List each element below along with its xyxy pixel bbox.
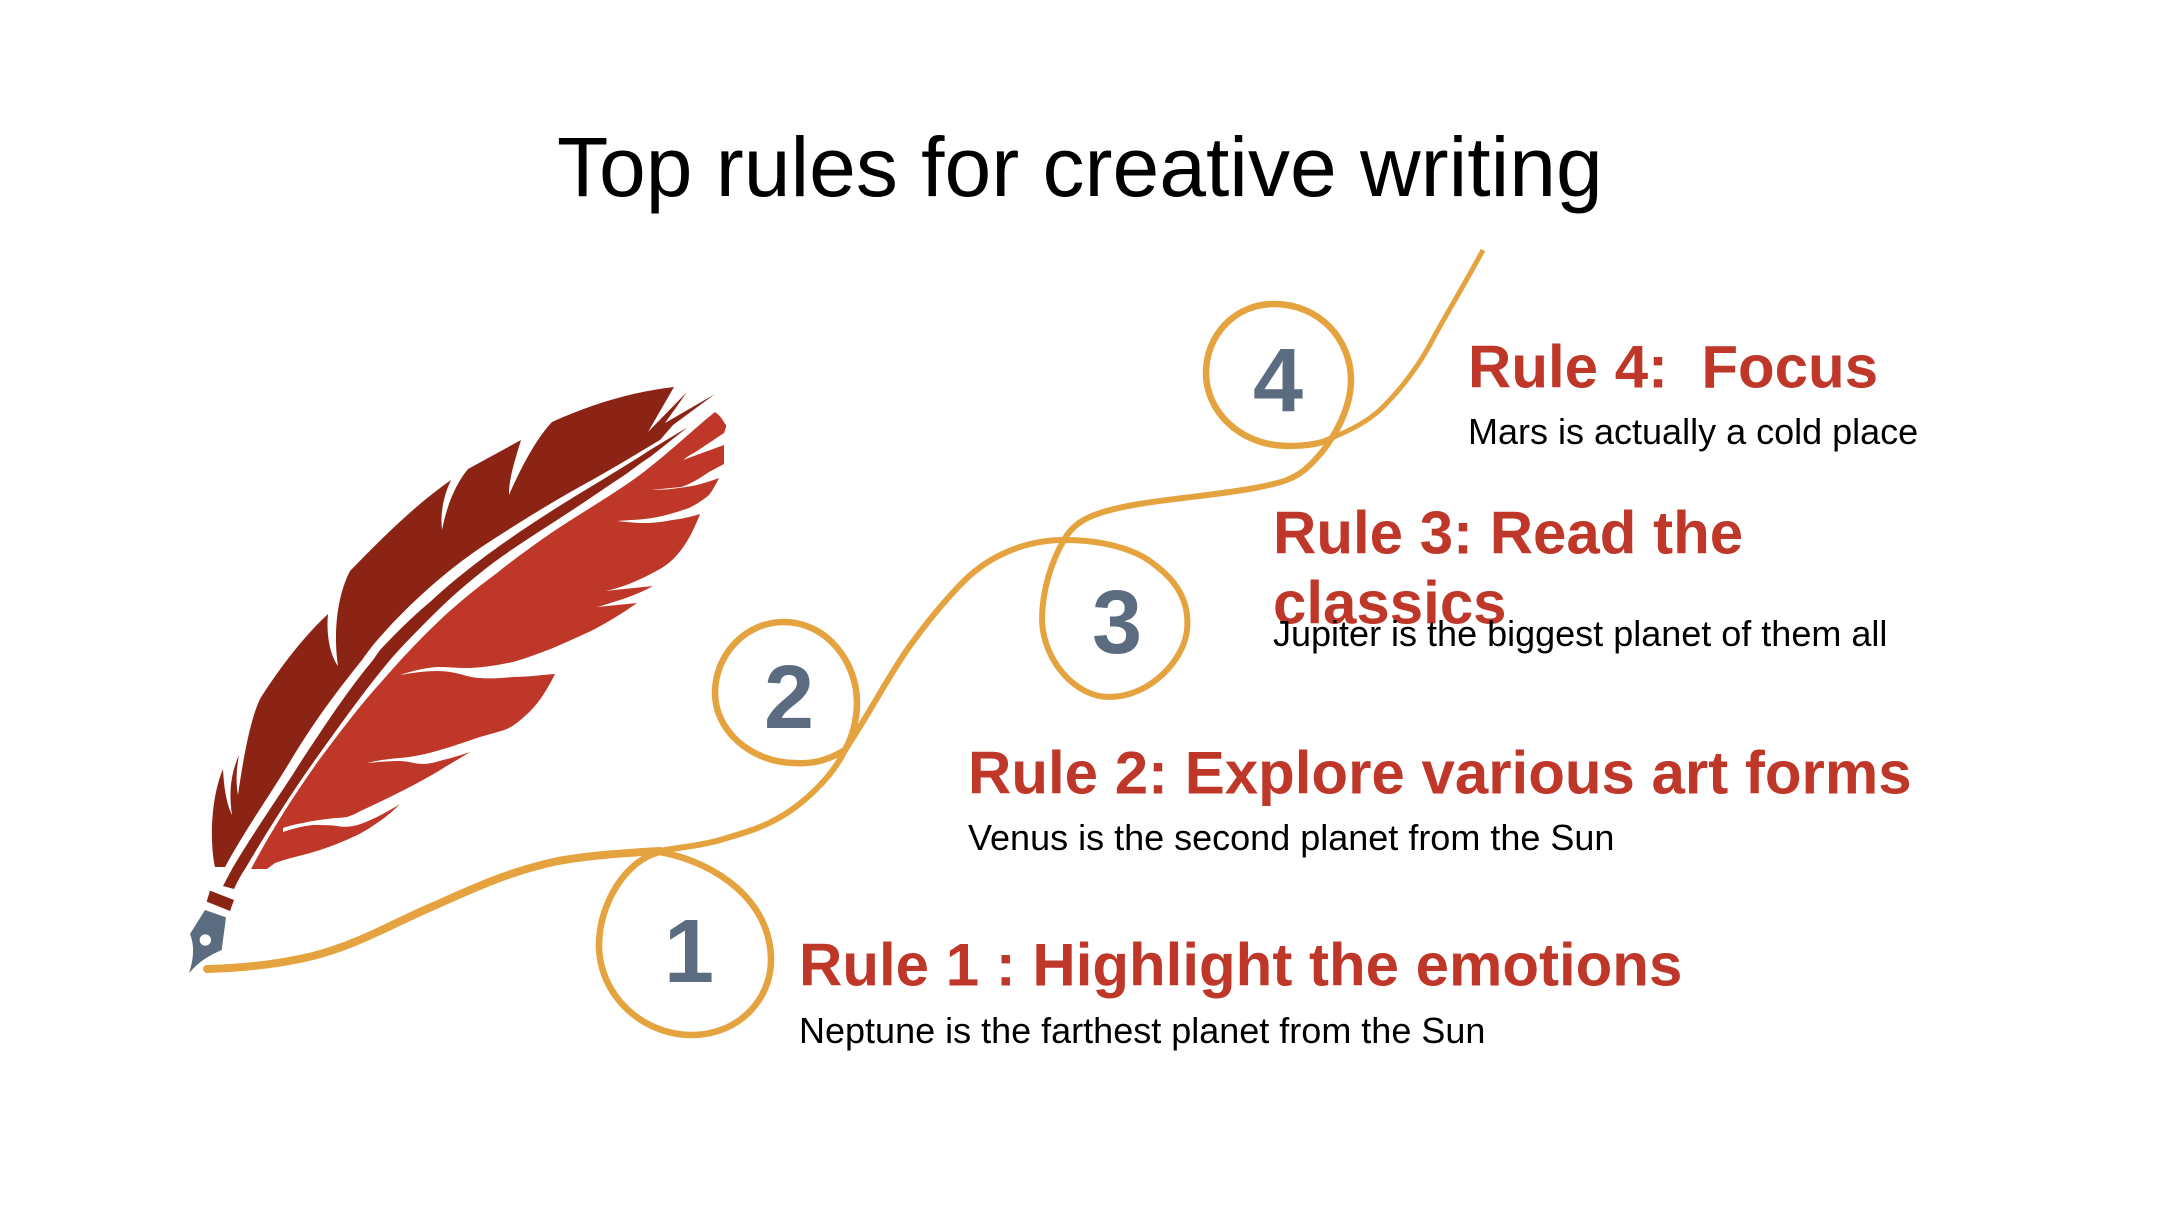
rule 1 heading: Rule 1 : Highlight the emotions xyxy=(799,932,1682,998)
rule 2 heading: Rule 2: Explore various art forms xyxy=(968,740,1912,806)
rule 3 heading: Rule 3: Read the xyxy=(1273,500,1743,566)
step number 2: 2 xyxy=(764,648,814,748)
step number 3: 3 xyxy=(1092,573,1142,673)
rule 3 text xyxy=(1273,500,1887,654)
rule 3 heading: classics xyxy=(1273,570,1507,636)
rule 3 description: Jupiter is the biggest planet of them all xyxy=(1273,613,1887,654)
rule 1 description: Neptune is the farthest planet from the Sun xyxy=(799,1010,1485,1051)
rule 2 description: Venus is the second planet from the Sun xyxy=(968,817,1614,858)
step number 4: 4 xyxy=(1253,331,1303,431)
rule 4 heading: Rule 4: Focus xyxy=(1468,334,1878,400)
winding ink line with loops xyxy=(207,250,1483,1035)
icon: quill pen feather xyxy=(189,387,726,973)
feather upper vane xyxy=(212,387,715,867)
pen nib xyxy=(189,910,226,973)
title: Top rules for creative writing xyxy=(557,120,1603,214)
rule 2 text xyxy=(968,740,1912,858)
feather shaft xyxy=(223,427,688,889)
rule 1 text xyxy=(799,932,1682,1051)
rule 4 text xyxy=(1468,334,1918,452)
feather lower vane xyxy=(251,412,726,869)
rule 4 description: Mars is actually a cold place xyxy=(1468,411,1918,452)
step number 1: 1 xyxy=(664,902,714,1002)
pen band xyxy=(207,891,234,911)
